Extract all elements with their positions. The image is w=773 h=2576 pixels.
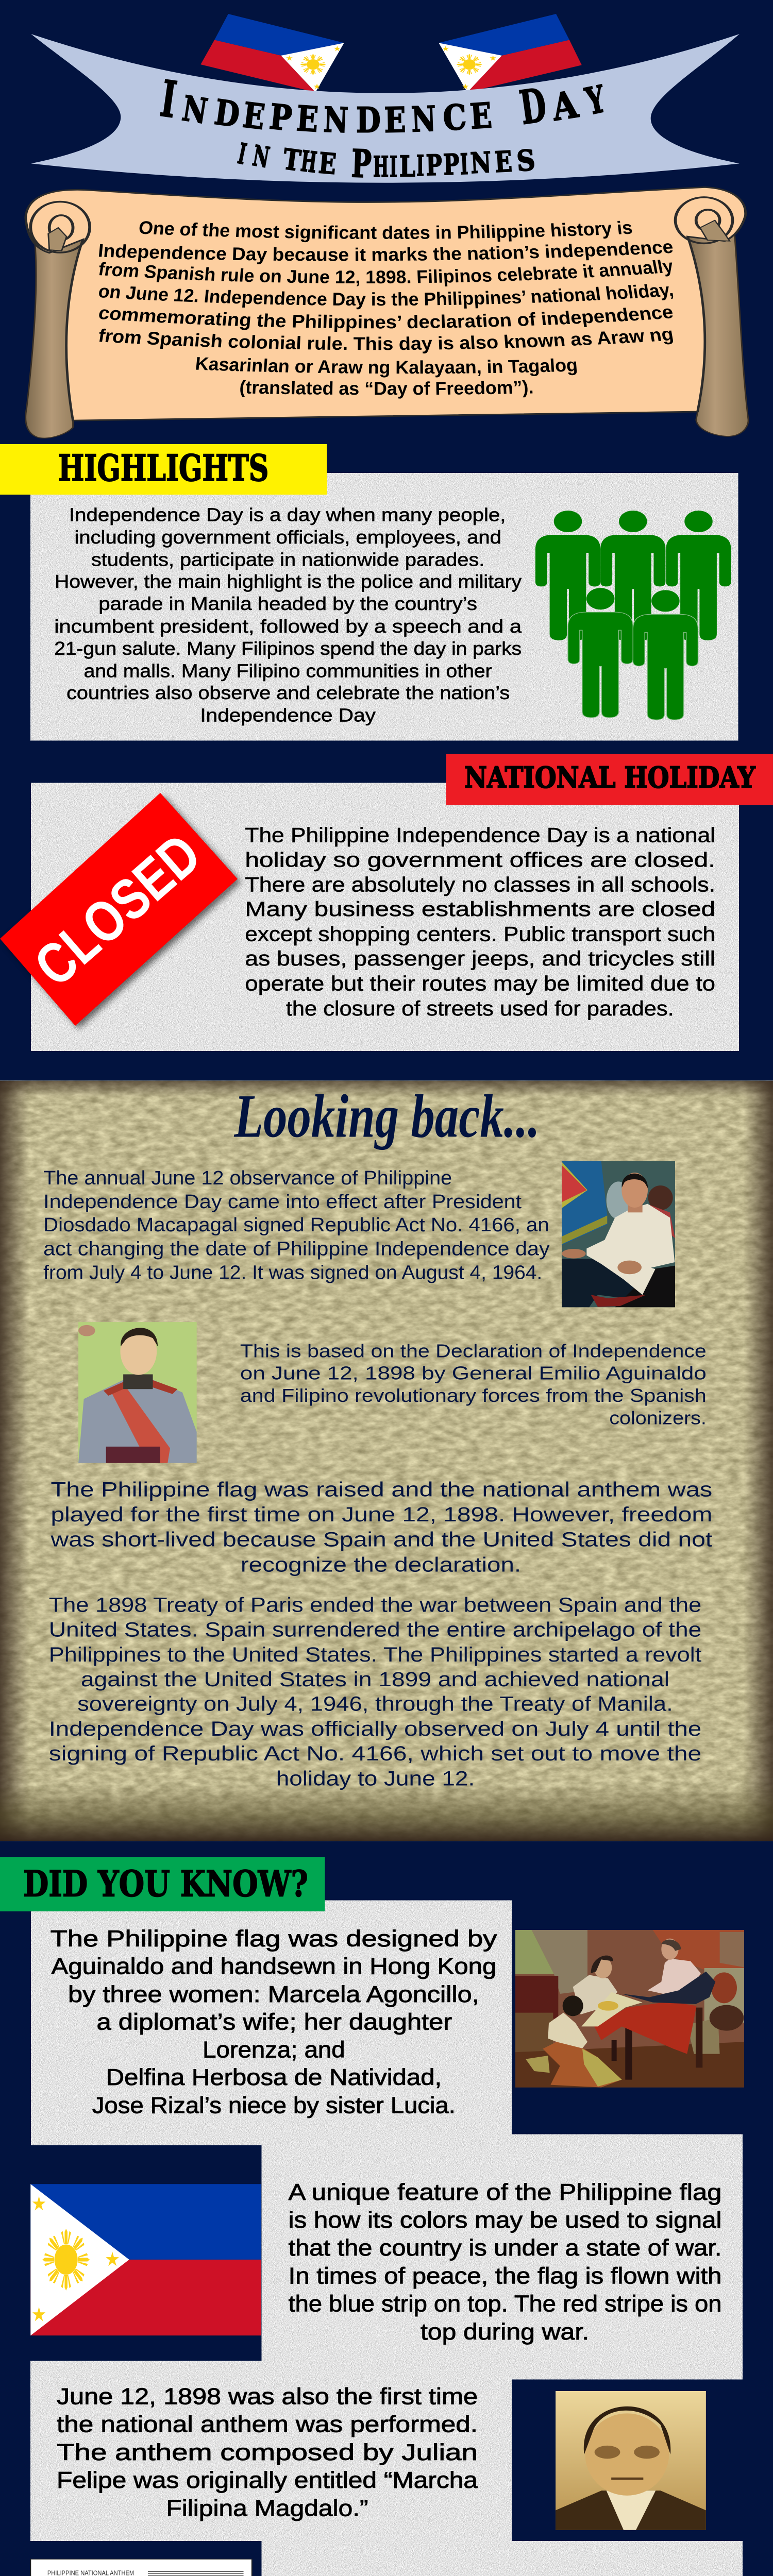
- intro text: (translated as “Day of Freedom”).: [240, 380, 533, 399]
- did you know tab: DID YOU KNOW?: [23, 1863, 308, 1905]
- title: Independence Day: N: [323, 100, 349, 141]
- title banner ribbon: [31, 34, 740, 183]
- flag designers text: Lorenza; and: [203, 2037, 345, 2063]
- highlights heading: HIGHLIGHTS: [58, 447, 268, 489]
- text block: annual observance: act changing the date of Philippine Independence day: [43, 1238, 550, 1260]
- national holiday body text: the closure of streets used for parades.: [286, 997, 674, 1020]
- text block: annual observance: from July 4 to June 12. It was signed on August 4, 1964.: [43, 1262, 542, 1283]
- text block: declaration of independence: colonizers.: [609, 1408, 707, 1428]
- first performance text: [57, 2384, 478, 2521]
- title: Independence Day: N: [179, 89, 210, 132]
- highlights body text: and malls. Many Filipino communities in other: [84, 661, 492, 682]
- national holiday tab: [446, 754, 773, 805]
- text block: treaty of Paris: [49, 1593, 701, 1790]
- intro text: Kasarinlan or Araw ng Kalayaan, in Tagalog: [196, 357, 577, 378]
- portrait: Julian Felipe: [556, 2391, 706, 2530]
- first performance text: Felipe was originally entitled “Marcha: [57, 2467, 478, 2493]
- intro text: from Spanish colonial rule. This day is also known as Araw ng: [99, 329, 673, 353]
- title: Independence Day: E: [295, 98, 320, 140]
- text block: declaration of independence: [240, 1340, 707, 1428]
- panel: flag was designed by Aguinaldo: [31, 1901, 512, 2145]
- icon: green people group: [535, 511, 731, 720]
- highlights body text: However, the main highlight is the police and military: [55, 571, 522, 592]
- highlights body text: Independence Day: [200, 705, 376, 726]
- flag designers text: by three women: Marcela Agoncillo,: [68, 1981, 479, 2007]
- panel background: [31, 1901, 512, 2145]
- national holiday body text: holiday so government offices are closed.: [245, 849, 715, 872]
- national holiday background: [31, 783, 739, 1051]
- intro text: on June 12. Independence Day is the Philippines’ national holiday,: [99, 284, 673, 309]
- highlights body text: students, participate in nationwide parades.: [91, 550, 484, 570]
- title: in the Philippines: N: [250, 139, 272, 174]
- title: in the Philippines: I: [390, 150, 397, 183]
- title: in the Philippines: H: [373, 150, 389, 183]
- title: in the Philippines: H: [299, 144, 318, 179]
- text block: flag raised and anthem played: recognize the declaration.: [241, 1553, 521, 1576]
- title: in the Philippines: T: [281, 142, 303, 178]
- panel background: [262, 2134, 743, 2379]
- highlights body text: Independence Day is a day when many people,: [69, 505, 506, 526]
- title: in the Philippines: I: [460, 147, 468, 181]
- panel: highlights: [0, 444, 738, 740]
- sheet music image: [30, 2559, 252, 2576]
- panel background: [262, 2541, 743, 2576]
- title: Independence Day: Y: [581, 77, 609, 124]
- title: in the Philippines: E: [317, 146, 338, 181]
- title: Independence Day: P: [267, 96, 294, 139]
- scroll left spiral: [30, 201, 90, 252]
- scroll left roller: [26, 236, 83, 438]
- flag: left header flag: [200, 14, 344, 92]
- title: in the Philippines: S: [515, 144, 536, 178]
- flag colors text: [289, 2179, 721, 2345]
- national holiday body text: Many business establishments are closed: [245, 898, 715, 921]
- text block: annual observance: Diosdado Macapagal signed Republic Act No. 4166, an: [43, 1214, 549, 1236]
- panel: looking back: [0, 1081, 773, 1841]
- flag colors text: top during war.: [421, 2319, 589, 2345]
- scroll right inner tube: [700, 221, 730, 241]
- panel background: [30, 2361, 512, 2541]
- panel: flag colors: [262, 2134, 743, 2379]
- flag: Philippine flag, state of war: [30, 2184, 261, 2335]
- icon: closed stamp: CLOSED: [23, 821, 212, 998]
- title: Independence Day: E: [241, 95, 267, 138]
- scroll right spiral: [676, 197, 733, 243]
- scroll left inner tube: [48, 228, 66, 251]
- highlights body text: countries also observe and celebrate the nation’s: [66, 683, 510, 704]
- title: in the Philippines: I: [416, 149, 424, 182]
- highlights body text: parade in Manila headed by the country’s: [98, 594, 477, 614]
- text block: flag raised and anthem played: [51, 1478, 712, 1576]
- title: Independence Day: E: [469, 95, 493, 137]
- intro text: from Spanish rule on June 12, 1898. Filipinos celebrate it annually: [99, 260, 672, 286]
- title: Independence Day: I: [157, 70, 180, 130]
- highlights body text: [54, 505, 522, 726]
- panel: intro scroll: [26, 187, 748, 438]
- title: in the Philippines: [235, 137, 536, 187]
- flag designers text: Jose Rizal’s niece by sister Lucia.: [92, 2092, 456, 2119]
- title: Independence Day: D: [356, 100, 381, 141]
- intro text: One of the most significant dates in Philippine history is: [139, 221, 632, 242]
- highlights body text: incumbent president, followed by a speech and a: [54, 616, 522, 637]
- national holiday body text: [245, 824, 715, 1020]
- title: Independence Day: E: [384, 100, 406, 141]
- title: in the Philippines: P: [443, 148, 460, 182]
- highlights background: [30, 473, 738, 740]
- painting: sewing of the flag: [515, 1930, 744, 2088]
- title: Independence Day: D: [516, 77, 549, 135]
- text block: treaty of Paris: holiday to June 12.: [276, 1767, 475, 1790]
- intro text: [99, 221, 673, 399]
- title: in the Philippines: P: [426, 149, 442, 182]
- first performance text: The anthem composed by Julian: [57, 2439, 478, 2465]
- title: Independence Day: A: [549, 82, 581, 129]
- intro text: Independence Day because it marks the nation’s independence: [99, 242, 673, 264]
- panel: national holiday: [31, 754, 773, 1051]
- flag designers text: [51, 1926, 497, 2119]
- portrait: Macapagal: [562, 1161, 675, 1307]
- panel: national anthem first performed: [30, 2361, 706, 2541]
- highlights tab: [0, 444, 327, 495]
- flag designers text: a diplomat’s wife; her daughter: [96, 2009, 452, 2035]
- parchment background: [0, 1081, 773, 1841]
- flag: right header flag: [439, 14, 582, 92]
- first performance text: June 12, 1898 was also the first time: [57, 2384, 478, 2410]
- flag designers text: The Philippine flag was designed by: [51, 1926, 497, 1952]
- text block: annual observance: Independence Day came into effect after President: [43, 1191, 522, 1212]
- title: in the Philippines: L: [399, 149, 415, 183]
- title: in the Philippines: N: [469, 145, 492, 180]
- title: in the Philippines: I: [235, 137, 249, 171]
- title: Independence Day: N: [411, 99, 436, 140]
- title: in the Philippines: E: [494, 144, 513, 179]
- title: in the Philippines: P: [350, 142, 372, 187]
- intro text: commemorating the Philippines’ declaration of independence: [99, 308, 673, 332]
- first performance text: the national anthem was performed.: [57, 2412, 478, 2437]
- first performance text: Filipina Magdalo.”: [166, 2495, 368, 2521]
- scroll right roller: [687, 233, 748, 436]
- portrait: Aguinaldo: [78, 1322, 197, 1463]
- title: Independence Day: C: [442, 97, 467, 139]
- highlights body text: 21-gun salute. Many Filipinos spend the day in parks: [54, 638, 522, 659]
- text block: annual observance: [43, 1167, 550, 1283]
- highlights body text: including government officials, employees, and: [74, 527, 501, 548]
- flag designers text: Delfina Herbosa de Natividad,: [106, 2064, 442, 2090]
- flag designers text: Aguinaldo and handsewn in Hong Kong: [51, 1954, 496, 1979]
- text block: annual observance: The annual June 12 observance of Philippine: [43, 1167, 452, 1189]
- panel: anthem had no words: [30, 2541, 743, 2576]
- title: Independence Day: [157, 70, 609, 141]
- title: Independence Day: D: [212, 92, 242, 135]
- scroll parchment body: [26, 187, 746, 420]
- did you know tab: [0, 1857, 325, 1911]
